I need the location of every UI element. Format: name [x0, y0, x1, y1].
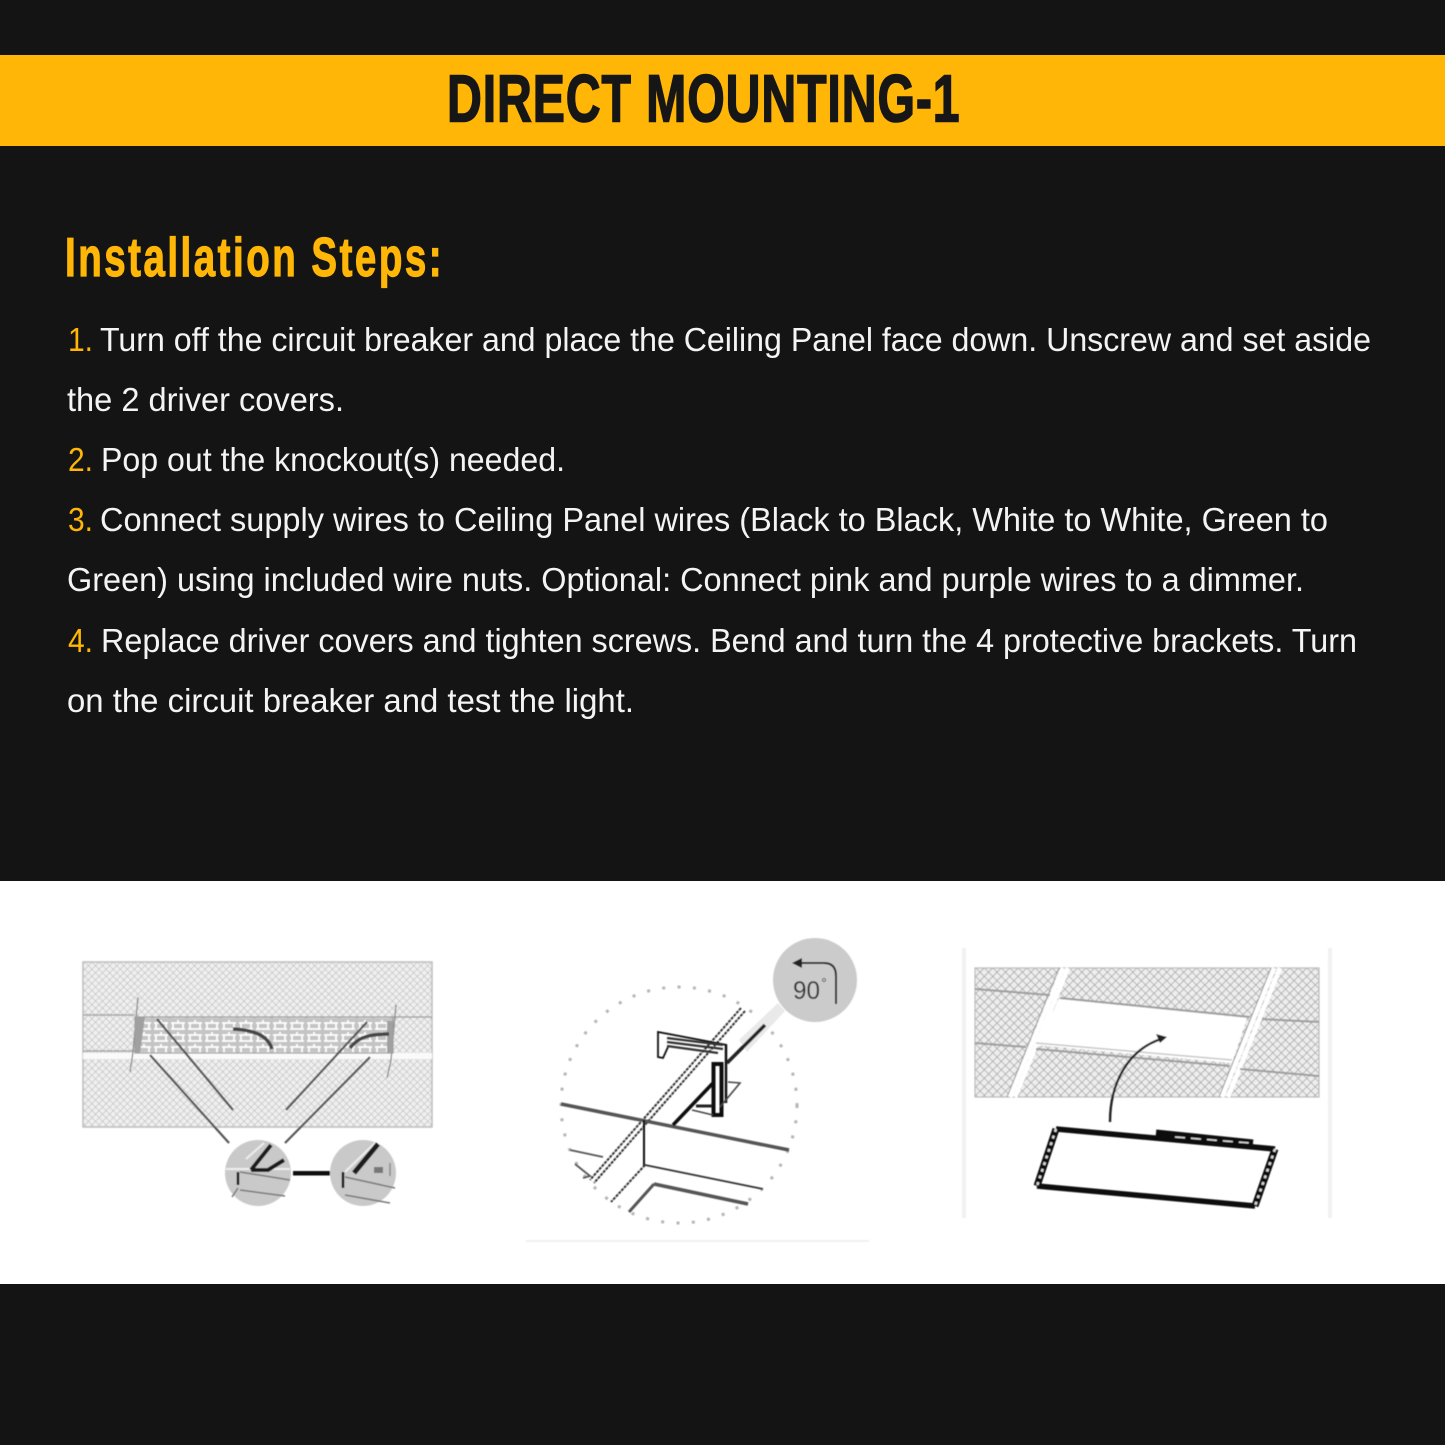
pointer lines — [150, 1019, 370, 1143]
step 1: Turn off the circuit breaker and place the Ceiling Panel face down. Unscrew and set aside — [100, 321, 1371, 358]
ceiling hatch — [83, 962, 432, 1127]
step 2: Pop out the knockout(s) needed. — [101, 441, 565, 478]
step 1 — [67, 321, 1371, 418]
detail circle right — [330, 1140, 396, 1206]
step 1: the 2 driver covers. — [67, 381, 344, 418]
heading: installation steps: Installation Steps: — [65, 227, 442, 289]
bracket — [658, 1025, 765, 1125]
title banner: DIRECT MOUNTING-1 — [447, 62, 960, 136]
grid rails — [975, 968, 1319, 1097]
step 3: Green) using included wire nuts. Optional: Connect pink and purple wires to a dimmer. — [67, 561, 1304, 598]
tile corner shading — [135, 1017, 393, 1053]
diagram 2: bracket rotated 90 degrees — [526, 938, 869, 1241]
grid tile — [135, 1017, 393, 1053]
curved arrow — [1110, 1034, 1167, 1122]
callout circle: 90 degrees — [773, 938, 857, 1022]
step 3 — [67, 501, 1328, 598]
dotted circle — [561, 987, 797, 1223]
ceiling edge line — [561, 1104, 789, 1150]
ceiling rails — [83, 997, 432, 1078]
baseline rule — [526, 1240, 869, 1242]
ceiling hatch — [975, 968, 1319, 1097]
step 3: 3. — [68, 501, 93, 538]
title banner — [0, 55, 1445, 146]
step 1: 1. — [68, 321, 93, 358]
tile curved arrows — [233, 1029, 389, 1049]
panel: diagram strip — [0, 881, 1445, 1284]
connector arrow — [293, 1171, 330, 1176]
callout circle: 90 degrees: 90 — [793, 977, 820, 1005]
diagram 1: removing ceiling tile and bending brackets — [83, 962, 432, 1206]
text block: numbered steps — [67, 321, 1371, 719]
light panel — [1037, 1129, 1275, 1206]
step 4: 4. — [68, 622, 93, 659]
step 4: Replace driver covers and tighten screws. Bend and turn the 4 protective brackets. Turn — [101, 622, 1357, 659]
lower ceiling lines — [570, 1120, 763, 1212]
diagram 3: lifting panel into ceiling — [964, 948, 1330, 1218]
step 4: on the circuit breaker and test the light. — [67, 682, 634, 719]
step 4 — [67, 622, 1357, 719]
frame edges — [964, 948, 1330, 1218]
step 2: 2. — [68, 441, 93, 478]
ceiling opening — [1036, 999, 1247, 1063]
detail circle left — [225, 1140, 291, 1206]
step 3: Connect supply wires to Ceiling Panel wires (Black to Black, White to White, Green to — [100, 501, 1328, 538]
T-bar rail diagonal — [590, 1008, 745, 1183]
pointer beam — [739, 1003, 785, 1052]
